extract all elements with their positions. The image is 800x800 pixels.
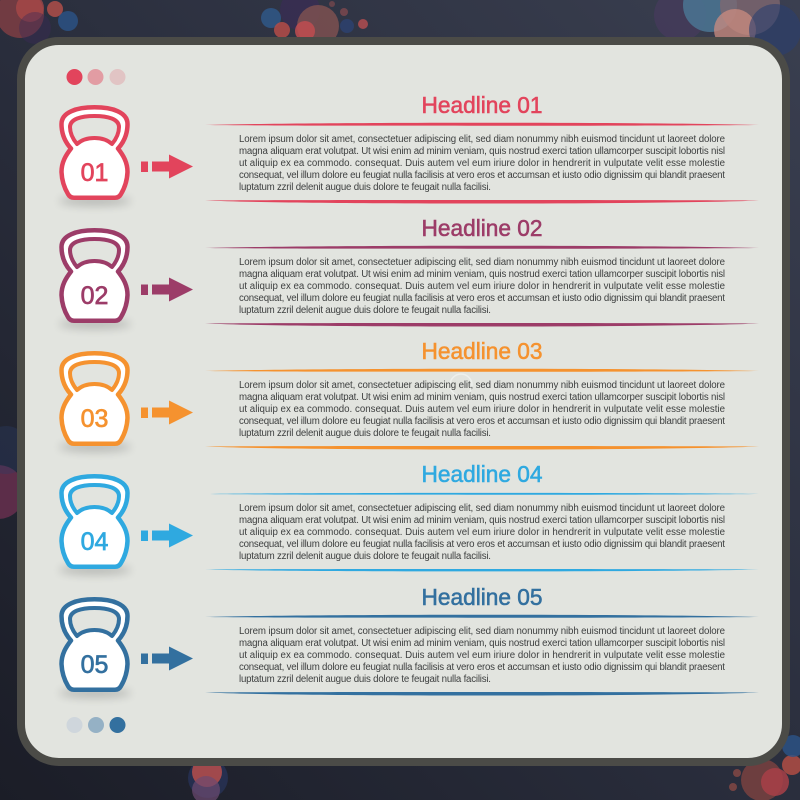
body text 02: consequat, vel illum dolore eu feugiat nulla facilisis at vero eros et accumsan et iusto odio dignissim qui blandit praesent [239, 293, 725, 304]
body text 04 [239, 503, 725, 562]
bottom rule 01 [205, 200, 759, 204]
bottom rule 04 [205, 569, 759, 571]
body text 05: Lorem ipsum dolor sit amet, consectetuer adipiscing elit, sed diam nonummy nibh euismod tincidunt ut laoreet dolore [239, 626, 725, 637]
kettlebell 04 [59, 476, 131, 575]
body text 01: magna aliquam erat volutpat. Ut wisi enim ad minim veniam, quis nostrud exerci tation ullamcorper suscipit lobortis nisl [239, 146, 725, 157]
body text 05: luptatum zzril delenit augue duis dolore te feugait nulla facilisi. [239, 674, 491, 685]
bottom rule 05 [205, 692, 759, 696]
top rule 02 [205, 246, 759, 249]
bokeh lights: bottom right [729, 735, 800, 800]
body text 01: consequat, vel illum dolore eu feugiat nulla facilisis at vero eros et accumsan et iusto odio dignissim qui blandit praesent [239, 170, 725, 181]
headline 04: Headline 04 [421, 461, 543, 487]
top rule 04 [205, 493, 759, 495]
body text 02: ut aliquip ex ea commodo. consequat. Duis autem vel eum iriure dolor in hendrerit in vulputate velit esse molestie [239, 281, 725, 292]
decorative dots: top [66, 69, 126, 85]
bokeh lights: top right [654, 0, 800, 56]
section 03 [59, 338, 759, 452]
section 04 [59, 461, 759, 575]
kettlebell 03 [59, 353, 131, 452]
body text 03: Lorem ipsum dolor sit amet, consectetuer adipiscing elit, sed diam nonummy nibh euismod tincidunt ut laoreet dolore [239, 380, 725, 391]
body text 04: ut aliquip ex ea commodo. consequat. Duis autem vel eum iriure dolor in hendrerit in vulputate velit esse molestie [239, 527, 725, 538]
kettlebell 05: 05 [81, 651, 108, 679]
body text 03 [239, 380, 725, 439]
body text 04: magna aliquam erat volutpat. Ut wisi enim ad minim veniam, quis nostrud exerci tation ullamcorper suscipit lobortis nisl [239, 515, 725, 526]
kettlebell 02 [59, 230, 131, 329]
kettlebell 01 [59, 107, 131, 206]
body text 03: magna aliquam erat volutpat. Ut wisi enim ad minim veniam, quis nostrud exerci tation ullamcorper suscipit lobortis nisl [239, 392, 725, 403]
body text 01 [239, 134, 725, 193]
kettlebell 05 [59, 599, 131, 698]
bottom rule 03 [205, 446, 759, 450]
body text 01: Lorem ipsum dolor sit amet, consectetuer adipiscing elit, sed diam nonummy nibh euismod tincidunt ut laoreet dolore [239, 134, 725, 145]
arrow 03 [141, 400, 193, 424]
decorative dots: bottom [66, 717, 126, 733]
kettlebell 02: 02 [81, 282, 108, 310]
kettlebell 01: 01 [81, 159, 108, 187]
section 05 [59, 584, 759, 698]
body text 04: luptatum zzril delenit augue duis dolore te feugait nulla facilisi. [239, 551, 491, 562]
bottom rule 02 [205, 323, 759, 326]
body text 03: ut aliquip ex ea commodo. consequat. Duis autem vel eum iriure dolor in hendrerit in vulputate velit esse molestie [239, 404, 725, 415]
bokeh lights: top centre [261, 0, 368, 47]
headline 05: Headline 05 [421, 584, 543, 610]
bokeh lights: left edge [0, 426, 30, 519]
top rule 05 [205, 615, 759, 618]
arrow 02 [141, 278, 193, 302]
headline 02: Headline 02 [421, 215, 543, 241]
body text 01: luptatum zzril delenit augue duis dolore te feugait nulla facilisi. [239, 182, 491, 193]
section 02 [59, 215, 759, 329]
headline 03: Headline 03 [421, 338, 543, 364]
bokeh lights: bottom centre [188, 757, 228, 800]
body text 04: consequat, vel illum dolore eu feugiat nulla facilisis at vero eros et accumsan et iusto odio dignissim qui blandit praesent [239, 539, 725, 550]
kettlebell 04: 04 [81, 528, 108, 556]
body text 02: magna aliquam erat volutpat. Ut wisi enim ad minim veniam, quis nostrud exerci tation ullamcorper suscipit lobortis nisl [239, 269, 725, 280]
top rule 03 [205, 369, 759, 372]
section 01 [59, 92, 759, 206]
body text 02 [239, 257, 725, 316]
body text 02: Lorem ipsum dolor sit amet, consectetuer adipiscing elit, sed diam nonummy nibh euismod tincidunt ut laoreet dolore [239, 257, 725, 268]
arrow 01 [141, 154, 193, 178]
body text 05: consequat, vel illum dolore eu feugiat nulla facilisis at vero eros et accumsan et iusto odio dignissim qui blandit praesent [239, 662, 725, 673]
body text 01: ut aliquip ex ea commodo. consequat. Duis autem vel eum iriure dolor in hendrerit in vulputate velit esse molestie [239, 158, 725, 169]
headline 01: Headline 01 [421, 92, 543, 118]
faint watermark [450, 374, 472, 396]
arrow 04 [141, 524, 193, 548]
body text 03: luptatum zzril delenit augue duis dolore te feugait nulla facilisi. [239, 428, 491, 439]
body text 05: magna aliquam erat volutpat. Ut wisi enim ad minim veniam, quis nostrud exerci tation ullamcorper suscipit lobortis nisl [239, 638, 725, 649]
bokeh lights: top left [0, 0, 78, 44]
arrow 05 [141, 646, 193, 670]
kettlebell 03: 03 [81, 405, 108, 433]
body text 02: luptatum zzril delenit augue duis dolore te feugait nulla facilisi. [239, 305, 491, 316]
body text 03: consequat, vel illum dolore eu feugiat nulla facilisis at vero eros et accumsan et iusto odio dignissim qui blandit praesent [239, 416, 725, 427]
body text 04: Lorem ipsum dolor sit amet, consectetuer adipiscing elit, sed diam nonummy nibh euismod tincidunt ut laoreet dolore [239, 503, 725, 514]
body text 05 [239, 626, 725, 685]
body text 05: ut aliquip ex ea commodo. consequat. Duis autem vel eum iriure dolor in hendrerit in vulputate velit esse molestie [239, 650, 725, 661]
top rule 01 [205, 123, 759, 126]
